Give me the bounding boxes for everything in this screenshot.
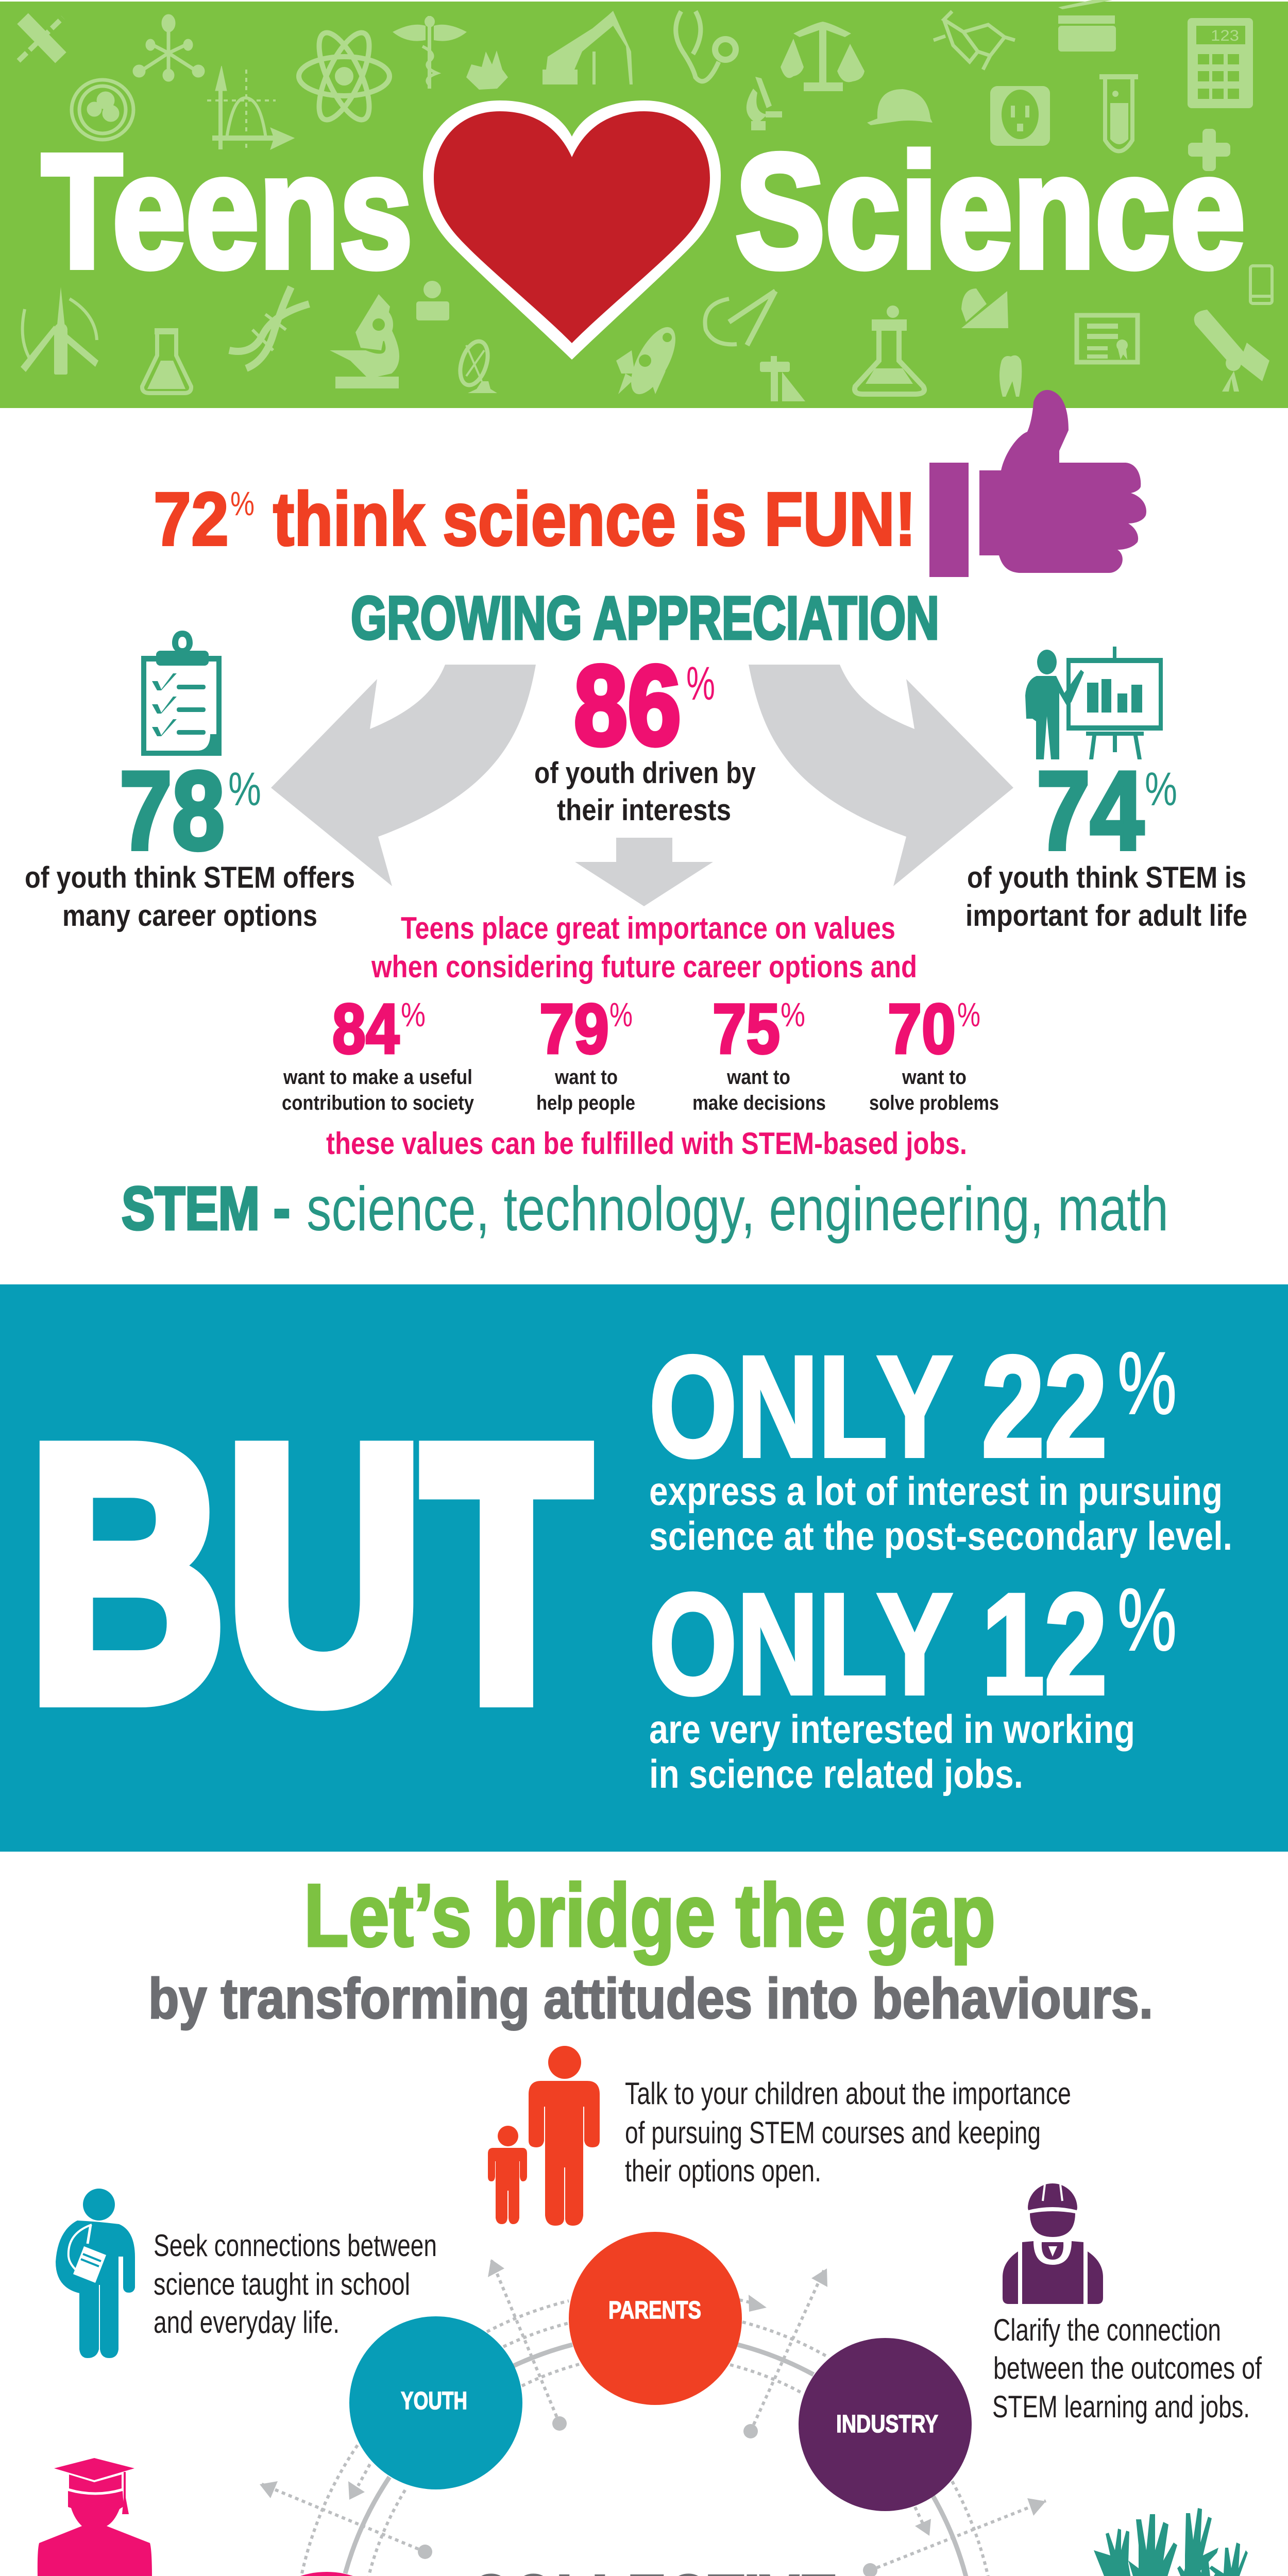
icon: telescope: [1194, 310, 1269, 392]
stat: 75%: %: [781, 995, 805, 1033]
stat: 74%: %: [1145, 763, 1177, 816]
text: 78% caption: many career options: [62, 899, 317, 933]
panel: but: [0, 1284, 1288, 1852]
node: post-secondary educators: [240, 2572, 413, 2576]
stat: 75%: make decisions: [692, 1092, 826, 1114]
stat: 74%: 74: [1037, 748, 1144, 873]
ring connectors: [249, 2259, 1052, 2576]
text: 86% caption: of youth driven by: [534, 756, 756, 790]
text: 74% caption: important for adult life: [965, 899, 1247, 933]
icon: student with backpack: [56, 2189, 135, 2358]
text: youth action: science taught in school: [154, 2267, 410, 2301]
node: youth: [349, 2316, 522, 2489]
text: 86% caption: their interests: [557, 793, 731, 827]
icon: caduceus: [393, 16, 467, 89]
icon: molecule: [133, 14, 205, 81]
stat: only 22%: ONLY 22: [649, 1326, 1107, 1486]
icon: calculator: 123: [1211, 27, 1239, 44]
icon: erlenmeyer flask: [855, 306, 924, 394]
icon: small microscope: [747, 77, 782, 130]
icon: petri dish: [72, 80, 133, 140]
icon: stethoscope: [676, 11, 736, 81]
icon: clapperboard: [1058, 0, 1116, 52]
text: 78% caption: of youth think STEM offers: [25, 861, 355, 894]
icon: outlet: [990, 86, 1050, 146]
stat: 78%: 78: [120, 748, 225, 873]
icon: thumbs up: [929, 390, 1146, 577]
stat: only 12%: ONLY 12: [649, 1564, 1107, 1724]
text: youth action: [154, 2228, 437, 2340]
stat: 72% fun: 72: [154, 477, 229, 562]
icon: dog: [466, 50, 508, 90]
icon: medical plus: [1188, 129, 1230, 171]
stat: 84%: want to make a useful: [283, 1066, 472, 1089]
icon: wind turbine: [21, 287, 98, 375]
stat: 70%: [869, 990, 999, 1114]
icon: raised hands: [1094, 2508, 1248, 2576]
heading: BUT: BUT: [28, 1372, 590, 1775]
stat: 79%: %: [609, 995, 633, 1033]
icon: pencil and ruler: [19, 18, 63, 61]
icon: graduate: [38, 2458, 152, 2576]
icon: t-square: [760, 356, 805, 401]
stat: only 22%: %: [1117, 1334, 1177, 1433]
text: parents action: [625, 2076, 1071, 2188]
node: industry: INDUSTRY: [836, 2411, 938, 2438]
stat: 79%: [536, 990, 635, 1114]
text: industry action: Clarify the connection: [993, 2313, 1221, 2347]
stat: 84%: contribution to society: [282, 1092, 474, 1114]
node: industry: [799, 2338, 972, 2511]
stat: 84%: %: [401, 995, 426, 1033]
icon: satellite dish: [455, 338, 497, 393]
icon: tooth: [999, 355, 1022, 397]
text: 12% caption: in science related jobs.: [649, 1751, 1023, 1797]
text: values intro: when considering future career options and: [371, 950, 917, 984]
node: youth: YOUTH: [401, 2387, 467, 2415]
text: values conclusion: these values can be fulfilled with STEM-based jobs.: [326, 1126, 967, 1161]
stat: 75%: [692, 990, 826, 1114]
panel: appreciation: [25, 390, 1247, 1244]
icon: scales: [781, 22, 865, 91]
arrowheads and nodes: [249, 2259, 1052, 2576]
icon: hexagon molecule: [934, 11, 1015, 70]
icon: worker: [416, 281, 449, 320]
diagram: collective action network: [240, 2232, 1063, 2576]
icon: construction worker: [1003, 2183, 1103, 2304]
stat: 78%: %: [228, 763, 261, 816]
title: Teens: Teens: [42, 121, 413, 301]
subheading: attitudes into behaviours: by transforming attitudes into behaviours.: [148, 1967, 1153, 2030]
node: parents: [569, 2232, 742, 2405]
stat: only 12%: %: [1117, 1570, 1177, 1669]
icon: graph: [207, 66, 294, 149]
stat: 72% fun: %: [230, 484, 255, 522]
stat: 84%: [282, 990, 474, 1114]
icon: calculator: [1188, 18, 1253, 108]
icon: presenter: [1025, 647, 1163, 759]
heading: bridge the gap: Let’s bridge the gap: [304, 1866, 995, 1965]
stat: 72% fun: think science is FUN!: [273, 477, 916, 562]
icon: set square: [961, 289, 1008, 328]
text: values intro: [371, 911, 917, 984]
stat: 70%: solve problems: [869, 1092, 999, 1114]
heart: [423, 100, 721, 360]
text: 22% caption: [649, 1468, 1232, 1558]
text: parents action: Talk to your children about the importance: [625, 2076, 1071, 2111]
icon: test tube: [1099, 74, 1138, 151]
stat: 70%: %: [957, 995, 980, 1033]
icon: pumpjack: [543, 11, 633, 84]
text: STEM definition: STEM -: [122, 1175, 290, 1243]
icon: flask: [142, 328, 191, 393]
text: 12% caption: are very interested in working: [649, 1706, 1135, 1752]
heading: growing appreciation: GROWING APPRECIATION: [351, 584, 939, 652]
icon: drafting compass: [705, 291, 775, 345]
stat: 86%: 86: [574, 642, 681, 769]
icon: DNA: [229, 287, 309, 368]
text: 86% caption: [534, 756, 756, 827]
stat: 79%: want to: [554, 1066, 618, 1089]
panel: header: [0, 0, 1288, 408]
text: parents action: of pursuing STEM courses and keeping: [625, 2115, 1041, 2150]
stat: 70%: want to: [902, 1066, 967, 1089]
icon: atom: [299, 26, 389, 126]
node: parents: PARENTS: [608, 2297, 701, 2324]
text: industry action: [992, 2313, 1262, 2424]
text: parents action: their options open.: [625, 2154, 821, 2188]
stat: 79%: help people: [536, 1092, 635, 1114]
stat: 86%: %: [686, 657, 715, 710]
arrow: right: [749, 665, 1013, 886]
arrow: down: [575, 838, 713, 906]
icon: parent and child: [488, 2046, 600, 2226]
arrow: left: [271, 665, 536, 886]
stat: 75%: 75: [713, 990, 780, 1069]
stat: 75%: want to: [726, 1066, 790, 1089]
stat: 79%: 79: [539, 990, 609, 1069]
stat: 70%: 70: [888, 990, 956, 1069]
text: 78% caption: [25, 861, 355, 933]
icon: smartphone: [1250, 266, 1272, 303]
text: 12% caption: [649, 1706, 1135, 1797]
text: values intro: Teens place great importance on values: [401, 911, 895, 945]
icon: clipboard: [141, 631, 222, 756]
icon: hard hat: [867, 89, 933, 125]
icon: large microscope: [330, 294, 399, 388]
text: 74% caption: of youth think STEM is: [967, 861, 1246, 894]
text: 74% caption: [965, 861, 1247, 933]
text: youth action: Seek connections between: [154, 2228, 437, 2263]
stat: 84%: 84: [332, 990, 399, 1069]
text: youth action: and everyday life.: [154, 2305, 340, 2340]
icon: rocket: [616, 320, 684, 401]
icon: certificate: [1077, 315, 1138, 362]
